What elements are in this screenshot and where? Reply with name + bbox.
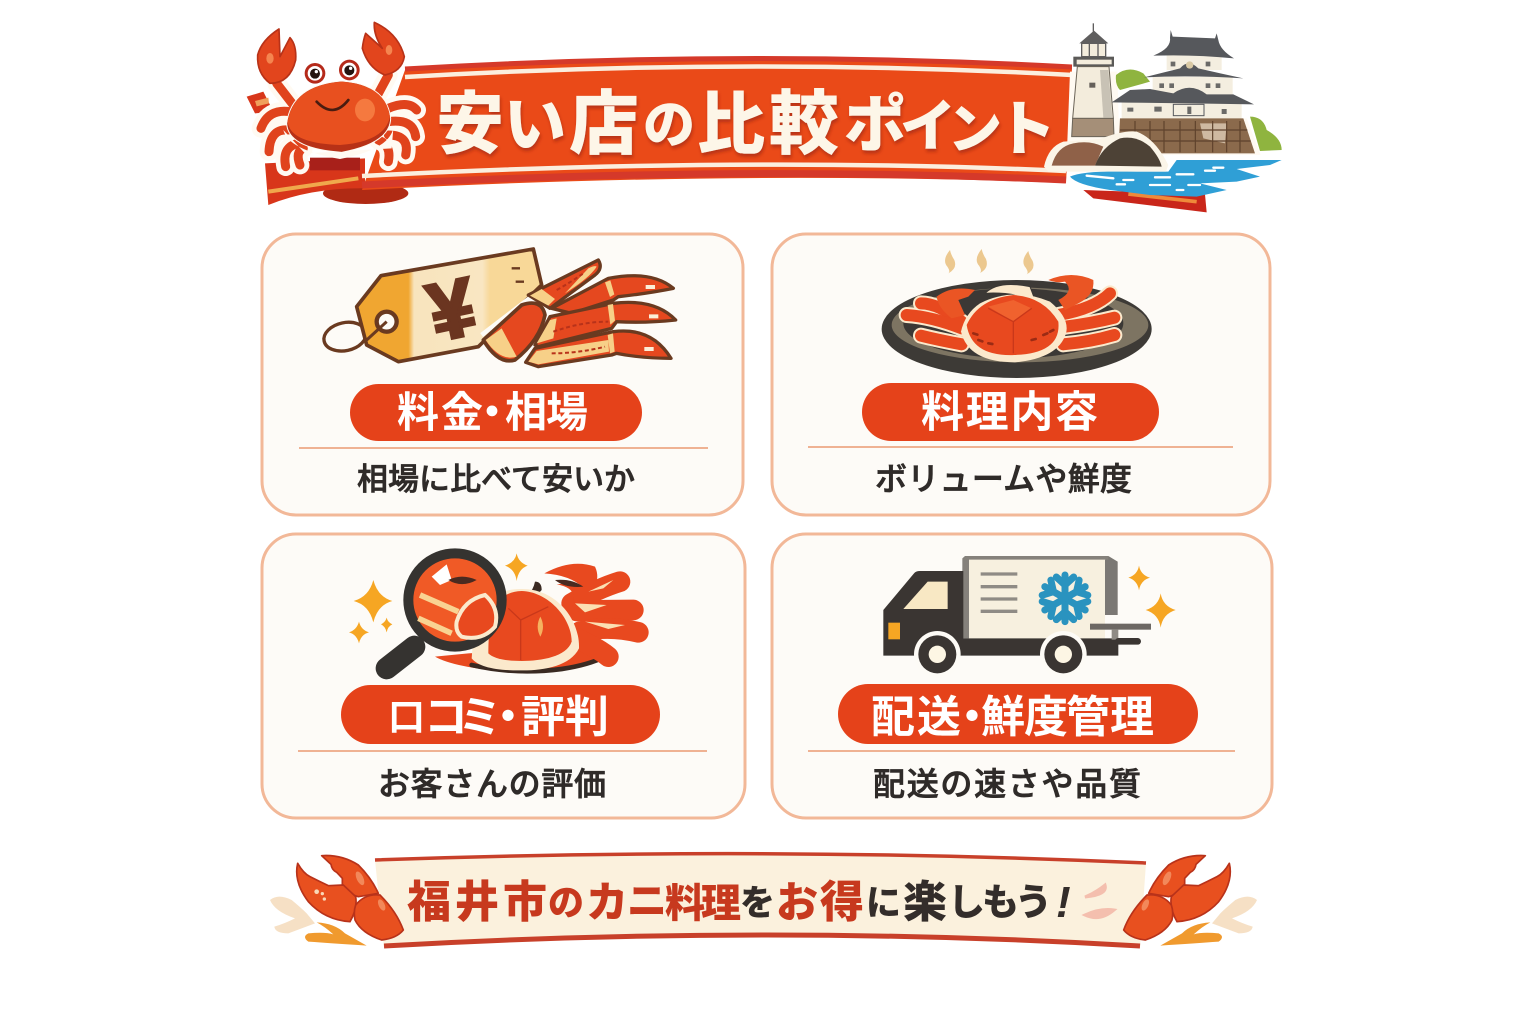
pill label text: コミ・評判 [424,693,609,742]
banner title text: ト [996,96,1056,163]
closing message text: 市 [503,878,547,927]
yen sign: ¥ [420,261,484,359]
banner body [375,854,1146,948]
panel: reviews [262,534,745,818]
closing message text: の [548,882,584,923]
pill label text: 口 [388,697,425,738]
banner title text: い [504,91,566,160]
panel: delivery [772,534,1272,818]
icon: crab mascot [258,22,417,167]
banner ribbon [362,58,1072,190]
lighthouse [1067,23,1119,142]
icon: lighthouse, castle and sea [1044,23,1282,197]
card frame [772,534,1272,818]
banner title text: 較 [769,85,839,163]
bottom banner [270,854,1257,948]
description text: ボリュームや鮮度 [875,461,1132,497]
closing message text: 楽 [903,878,947,927]
closing message text: 理 [701,882,741,926]
pink accent marks [1085,885,1114,918]
closing message text: 料 [665,882,705,926]
closing message text: に [866,884,901,923]
card frame [262,234,743,515]
closing message text: ! [1056,878,1071,927]
banner title text: の [643,97,695,155]
label pill [341,685,660,744]
pill label text: 配送・鮮度管理 [871,693,1154,742]
sparkles [1128,566,1176,628]
banner right tail [1083,190,1207,212]
left claw with leaves [270,856,403,946]
icon: magnifier over crab with sparkles [349,553,638,673]
closing message text: 福 [407,878,451,927]
panel: dishes [772,234,1270,515]
closing message text: 井 [455,878,499,927]
card frame [772,234,1270,515]
pill label text: 料理内容 [921,389,1098,437]
label pill [838,684,1198,744]
right claw with leaves [1124,856,1257,946]
description text: 相場に比べて安いか [357,462,635,497]
pill label text: 料金・相場 [397,389,588,436]
castle [1112,30,1261,155]
closing message text: も [982,882,1019,923]
banner title text: 店 [569,85,639,163]
panel: price [262,234,743,515]
closing message text: う [1015,882,1052,923]
snowflake [1040,575,1090,622]
banner title text: 比 [697,87,765,163]
banner title text: 安 [436,87,504,163]
icon: refrigerated truck [883,556,1176,678]
label pill [862,383,1159,441]
closing message text: お [776,879,818,926]
green bushes [1116,70,1282,151]
sea [1070,160,1282,197]
closing message text: カ [586,879,628,926]
banner title text: ン [948,100,1002,160]
description text: お客さんの評価 [378,766,606,802]
banner left tail [247,92,408,205]
banner title text: ポ [844,91,906,160]
banner title text: イ [900,95,956,158]
label pill [350,384,642,441]
closing message text: ニ [627,880,667,924]
icon: crab on plate with steam [882,249,1152,378]
description text: 配送の速さや品質 [873,766,1141,802]
closing message text: を [740,884,775,923]
closing message text: 得 [820,878,864,927]
icon: price tag and crab legs [321,249,676,367]
card frame [262,534,745,818]
title banner [247,22,1282,212]
rocks [1044,131,1168,172]
closing message text: し [948,882,985,923]
